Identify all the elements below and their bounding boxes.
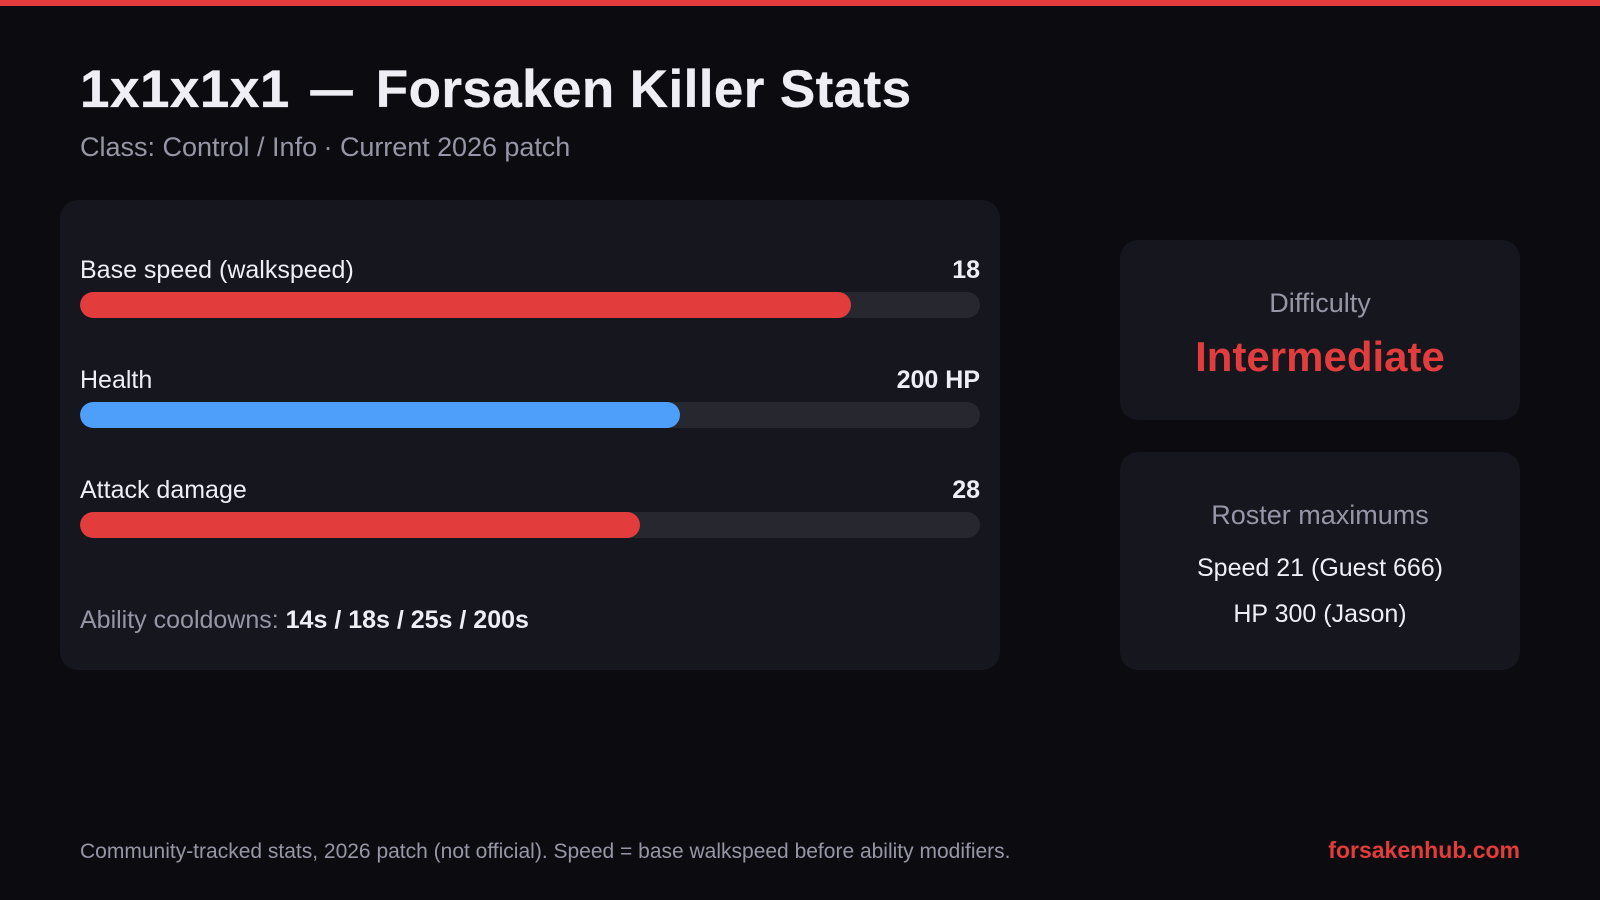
- roster heading: Roster maximums: [1211, 500, 1429, 530]
- top accent bar: [0, 0, 1600, 6]
- ability cooldowns: Ability cooldowns: 14s / 18s / 25s / 200s: [80, 606, 529, 634]
- panel: roster maximums: [1120, 452, 1520, 670]
- stat value: attack damage: 28: [952, 476, 980, 504]
- stat label: attack damage: Attack damage: [80, 476, 247, 504]
- stat value: health: 200 HP: [897, 366, 980, 394]
- title: —: [310, 60, 353, 119]
- difficulty value: Intermediate: [1195, 333, 1445, 380]
- difficulty label: Difficulty: [1269, 288, 1371, 318]
- stat label: base speed: Base speed (walkspeed): [80, 256, 354, 284]
- roster hp max: HP 300 (Jason): [1233, 600, 1407, 628]
- footer brand: forsakenhub.com: [1328, 837, 1520, 863]
- bar: base speed: [80, 292, 980, 318]
- subtitle: Class: Control / Info · Current 2026 patch: [80, 132, 570, 162]
- bar: attack damage: [80, 512, 980, 538]
- bar: health: [80, 402, 980, 428]
- roster speed max: Speed 21 (Guest 666): [1197, 554, 1443, 582]
- footer note: Community-tracked stats, 2026 patch (not official). Speed = base walkspeed before ability modifiers.: [80, 840, 1011, 863]
- stat value: base speed: 18: [952, 256, 980, 284]
- panel: difficulty: [1120, 240, 1520, 420]
- title: 1x1x1x1 Forsaken Killer Stats: [80, 60, 911, 119]
- stat label: health: Health: [80, 366, 152, 394]
- panel: stat bars: [60, 200, 1000, 670]
